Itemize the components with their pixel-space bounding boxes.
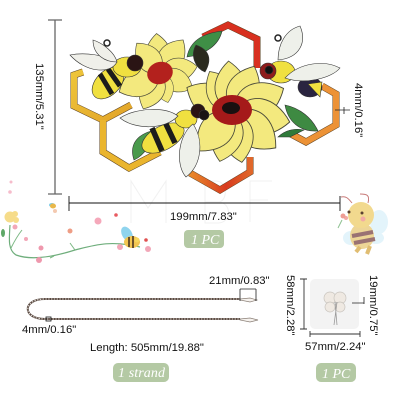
- length label: Length: 505mm/19.88": [90, 342, 204, 354]
- dimension: chain width 4mm: [22, 317, 76, 336]
- decoration: flower vine: [1, 180, 151, 263]
- icon: small bee: [49, 203, 57, 213]
- icon: blue-winged bee: [119, 225, 140, 248]
- dimension: hook width 57mm: 57mm/2.24": [305, 341, 366, 353]
- sunflower left: [113, 32, 199, 114]
- chain: [28, 298, 258, 322]
- dimension: width 199mm: [69, 196, 340, 223]
- dimension: clasp 21mm: [209, 275, 270, 301]
- badge: 1 PC suncatcher: [184, 230, 224, 248]
- honeycomb frame: [74, 25, 336, 190]
- stained glass suncatcher: [70, 25, 340, 190]
- watermark: [131, 181, 272, 223]
- badge: 1 PC hook: [316, 363, 356, 382]
- badge: 1 strand: 1 strand: [118, 366, 166, 381]
- badge: 1 PC suncatcher: 1 PC: [191, 233, 220, 248]
- dimension: chain width 4mm: 4mm/0.16": [22, 324, 76, 336]
- dimension: clasp 21mm: 21mm/0.83": [209, 275, 270, 287]
- dimension: height 135mm: [33, 20, 62, 194]
- dimension: height 135mm: 135mm/5.31": [33, 63, 45, 130]
- sunflower right: [179, 60, 293, 166]
- dimension: hook 19mm: 19mm/0.75": [367, 275, 379, 336]
- badge: 1 PC hook: 1 PC: [322, 367, 351, 382]
- dimension: hook height 58mm: 58mm/2.28": [284, 275, 296, 336]
- wall hook: [310, 279, 359, 329]
- leaves: [132, 31, 318, 160]
- bee right: [260, 26, 340, 97]
- badge: 1 strand: [113, 363, 169, 382]
- dimension: hook 19mm: [352, 275, 379, 336]
- bee top left: [70, 40, 143, 105]
- dimension: thickness 4mm: 4mm/0.16": [352, 83, 364, 137]
- icon: cute bee: [338, 194, 388, 254]
- dimension: width 199mm: 199mm/7.83": [170, 211, 237, 223]
- bee centre: [120, 104, 209, 177]
- dimension: thickness 4mm: [335, 83, 364, 137]
- dimension: hook height 58mm: [284, 275, 307, 336]
- dimension: hook width 57mm: [305, 331, 366, 353]
